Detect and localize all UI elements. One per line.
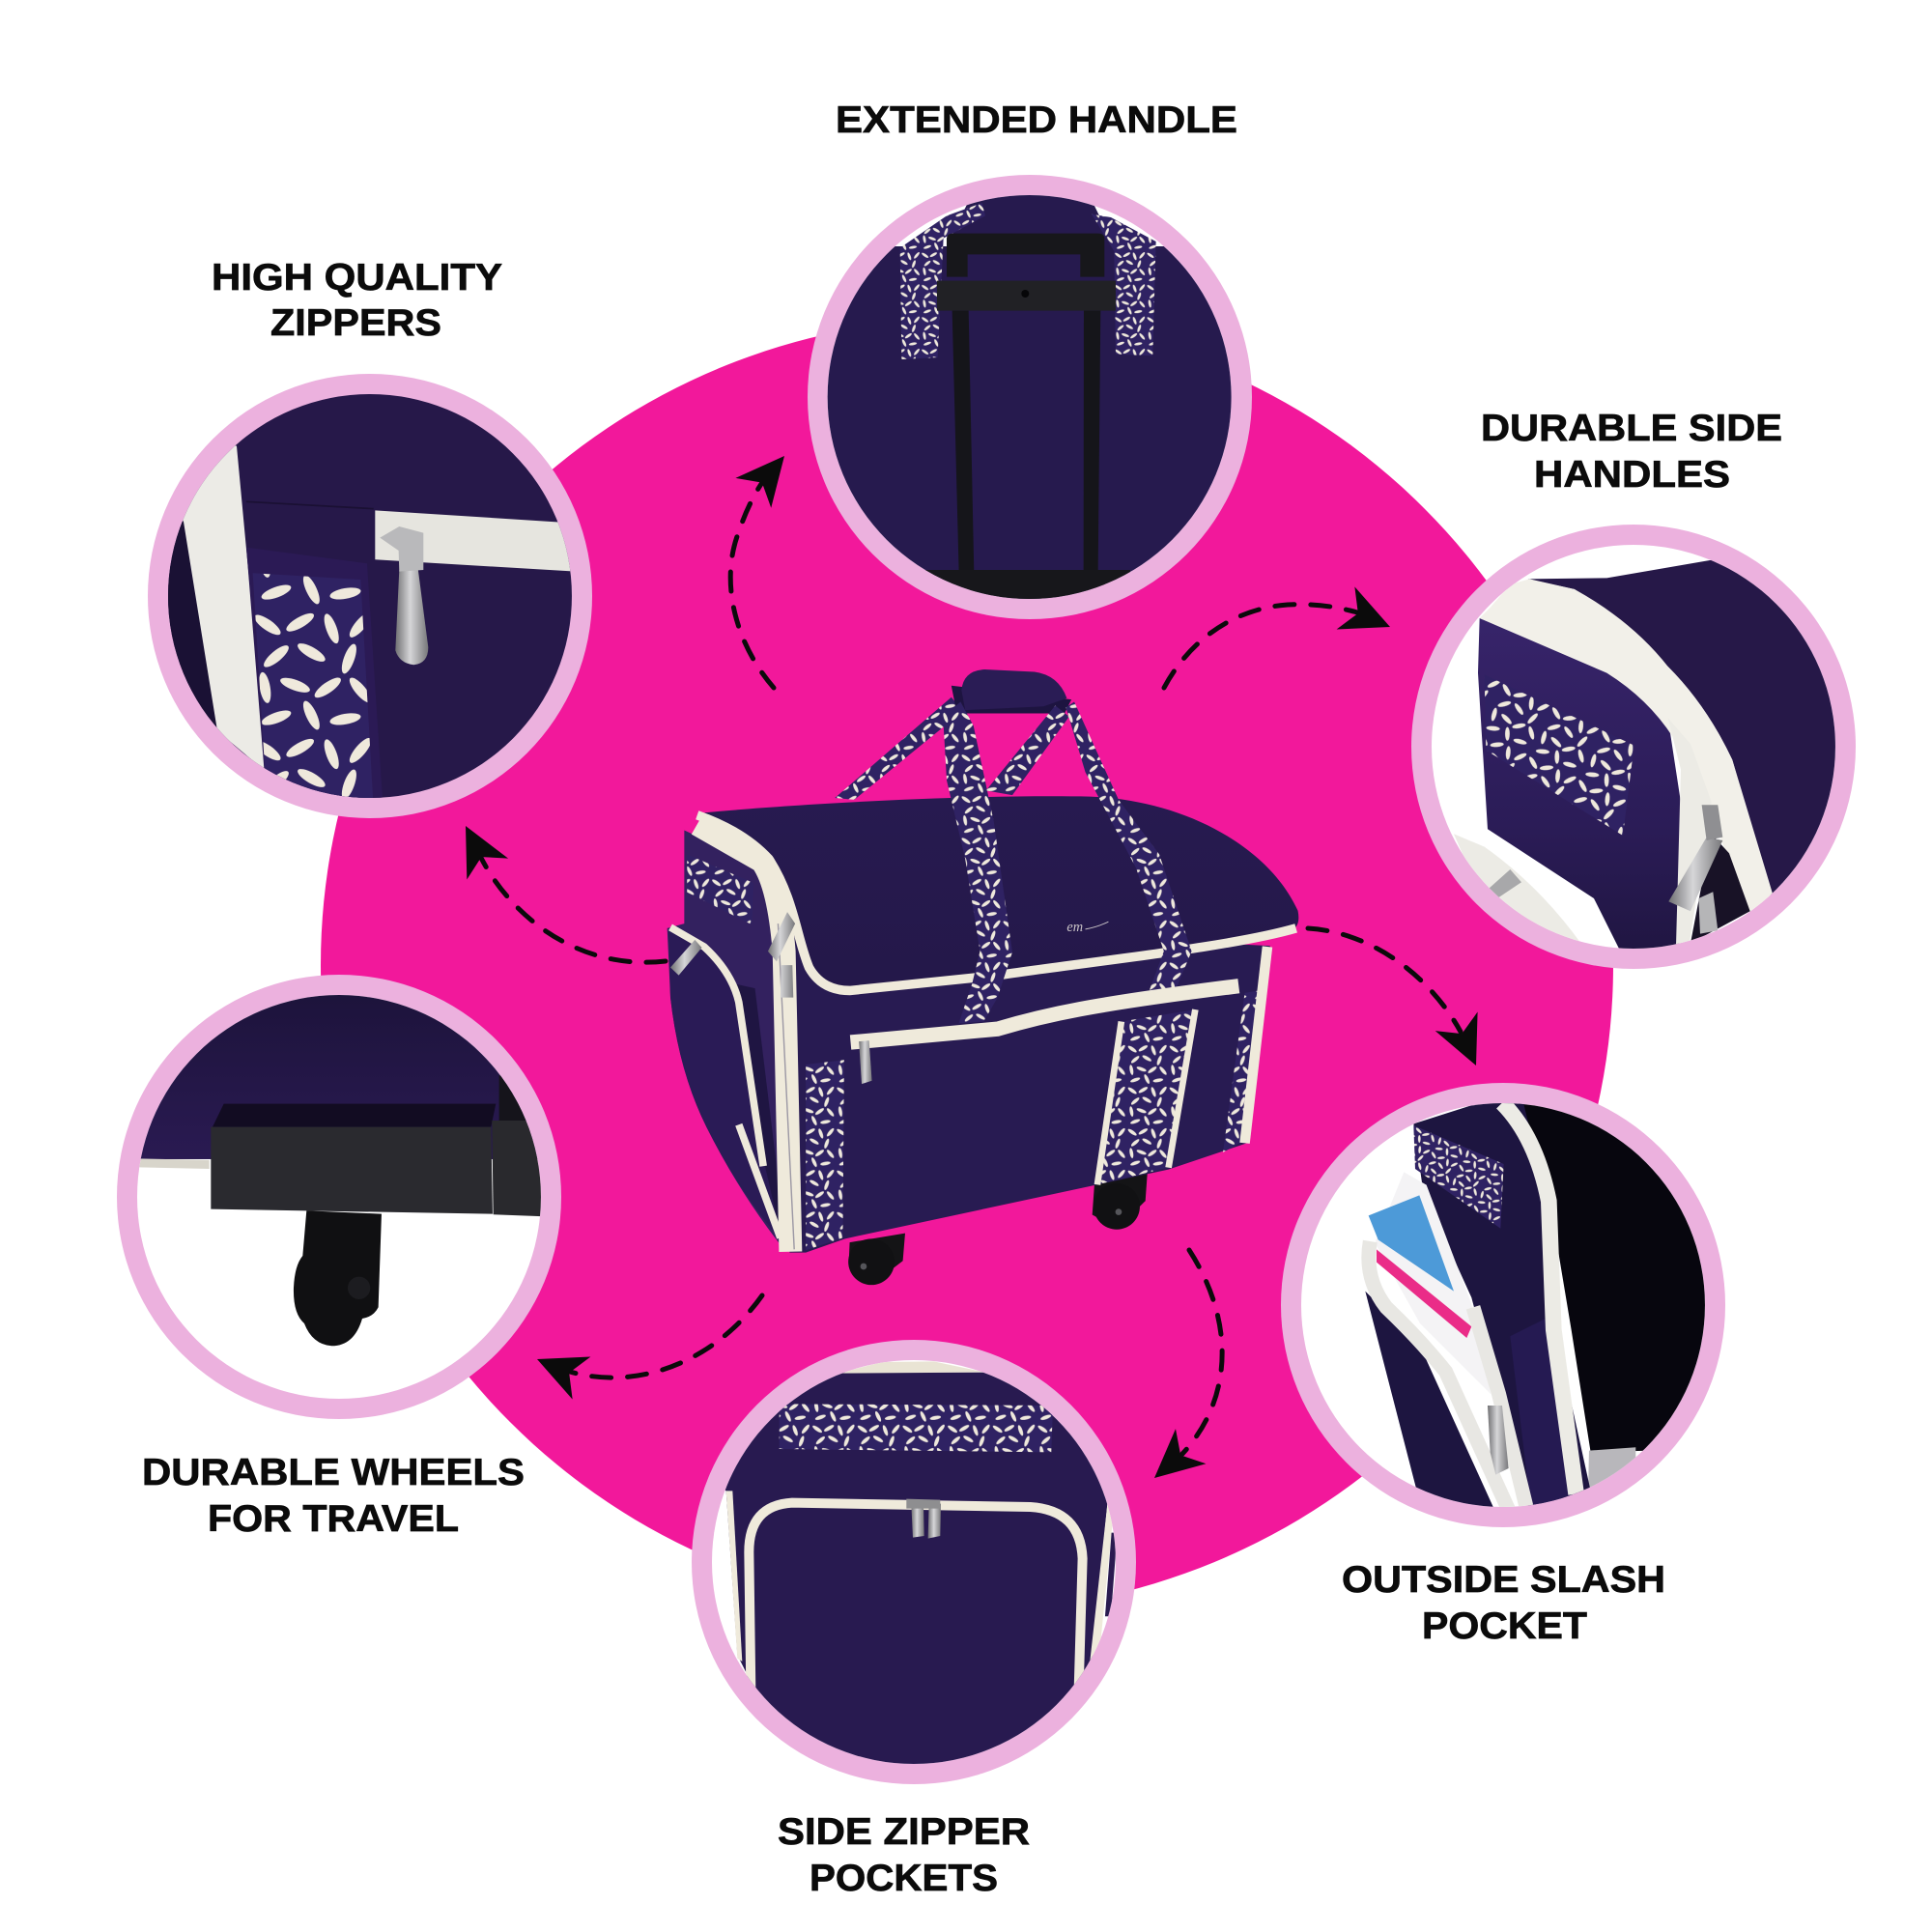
photo: side pocket [712, 1360, 1116, 1764]
label: high quality zippers: ZIPPERS [270, 302, 441, 344]
front strap right [1065, 702, 1192, 994]
zipper line [778, 923, 794, 1249]
lid piping [697, 815, 1296, 990]
label: durable wheels [142, 1452, 525, 1540]
bag lid [704, 796, 1298, 992]
front strap left [943, 702, 1012, 1023]
bag logo: em [1066, 920, 1083, 935]
photo: side handle [1432, 545, 1835, 949]
panel: durable side handles [1411, 525, 1856, 969]
arrow: to side handles [1164, 586, 1399, 688]
ring [692, 1340, 1136, 1784]
label: side zipper pockets: POCKETS [810, 1858, 998, 1899]
label: side zipper pockets [778, 1811, 1030, 1899]
bag wheels [848, 1169, 1148, 1285]
arrow: to side zipper pockets [1139, 1250, 1222, 1495]
label: durable side handles: DURABLE SIDE [1481, 408, 1782, 449]
arrow: to zippers [445, 815, 666, 962]
bag side panel [668, 830, 792, 1247]
ring [117, 975, 561, 1419]
bag front panel [776, 905, 1270, 1253]
label: side zipper pockets: SIDE ZIPPER [778, 1811, 1030, 1853]
front rice strip centre [1097, 1009, 1195, 1184]
photo: slash pocket [1301, 1103, 1705, 1507]
main zipper edge [697, 824, 790, 1252]
arrow: to wheels [528, 1295, 762, 1400]
label: high quality zippers [212, 257, 502, 344]
pocket zipper pull [670, 940, 702, 976]
label: outside slash pocket [1342, 1559, 1665, 1647]
side pocket gusset [734, 983, 782, 1242]
panel: extended handle [808, 175, 1252, 619]
bag back strap [835, 697, 963, 800]
right edge piping [1245, 947, 1267, 1143]
side pocket zipper [670, 927, 781, 1237]
front zipper pull [859, 1040, 872, 1084]
main product: rolling bag [668, 669, 1298, 1285]
panel: outside slash pocket [1281, 1083, 1725, 1527]
label: outside slash pocket: OUTSIDE SLASH [1342, 1559, 1665, 1601]
ring [1411, 525, 1856, 969]
label: outside slash pocket: POCKET [1422, 1605, 1588, 1647]
panel: high quality zippers [148, 374, 592, 818]
title: extended handle: EXTENDED HANDLE [836, 99, 1237, 141]
label: durable side handles [1481, 408, 1782, 496]
label: durable side handles: HANDLES [1534, 454, 1730, 496]
photo: trolley handle [827, 195, 1232, 599]
front rice strip right [1223, 990, 1259, 1152]
front rice strip left [806, 1060, 844, 1250]
label: durable wheels: DURABLE WHEELS [142, 1452, 525, 1493]
front pocket zipper [851, 986, 1238, 1042]
label: high quality zippers: HIGH QUALITY [212, 257, 502, 298]
side rice patch [687, 854, 753, 924]
panel: side zipper pockets [692, 1340, 1136, 1784]
bag top handle [961, 669, 1066, 710]
photo: wheel [137, 995, 541, 1399]
label: durable wheels: FOR TRAVEL [208, 1498, 459, 1540]
bag handle loop [952, 686, 1071, 713]
side pocket [668, 928, 782, 1242]
ring [808, 175, 1252, 619]
side zipper pull [768, 912, 795, 998]
arrow: to extended handle [730, 441, 802, 688]
panel: durable wheels [117, 975, 561, 1419]
ring [148, 374, 592, 818]
front strip piping [1097, 1009, 1195, 1184]
bag logo [1066, 920, 1108, 935]
photo: zipper detail [168, 394, 572, 798]
arrow: to slash pocket [1308, 928, 1497, 1075]
ring [1281, 1083, 1725, 1527]
background circle [321, 319, 1613, 1611]
bag second strap [986, 705, 1069, 795]
